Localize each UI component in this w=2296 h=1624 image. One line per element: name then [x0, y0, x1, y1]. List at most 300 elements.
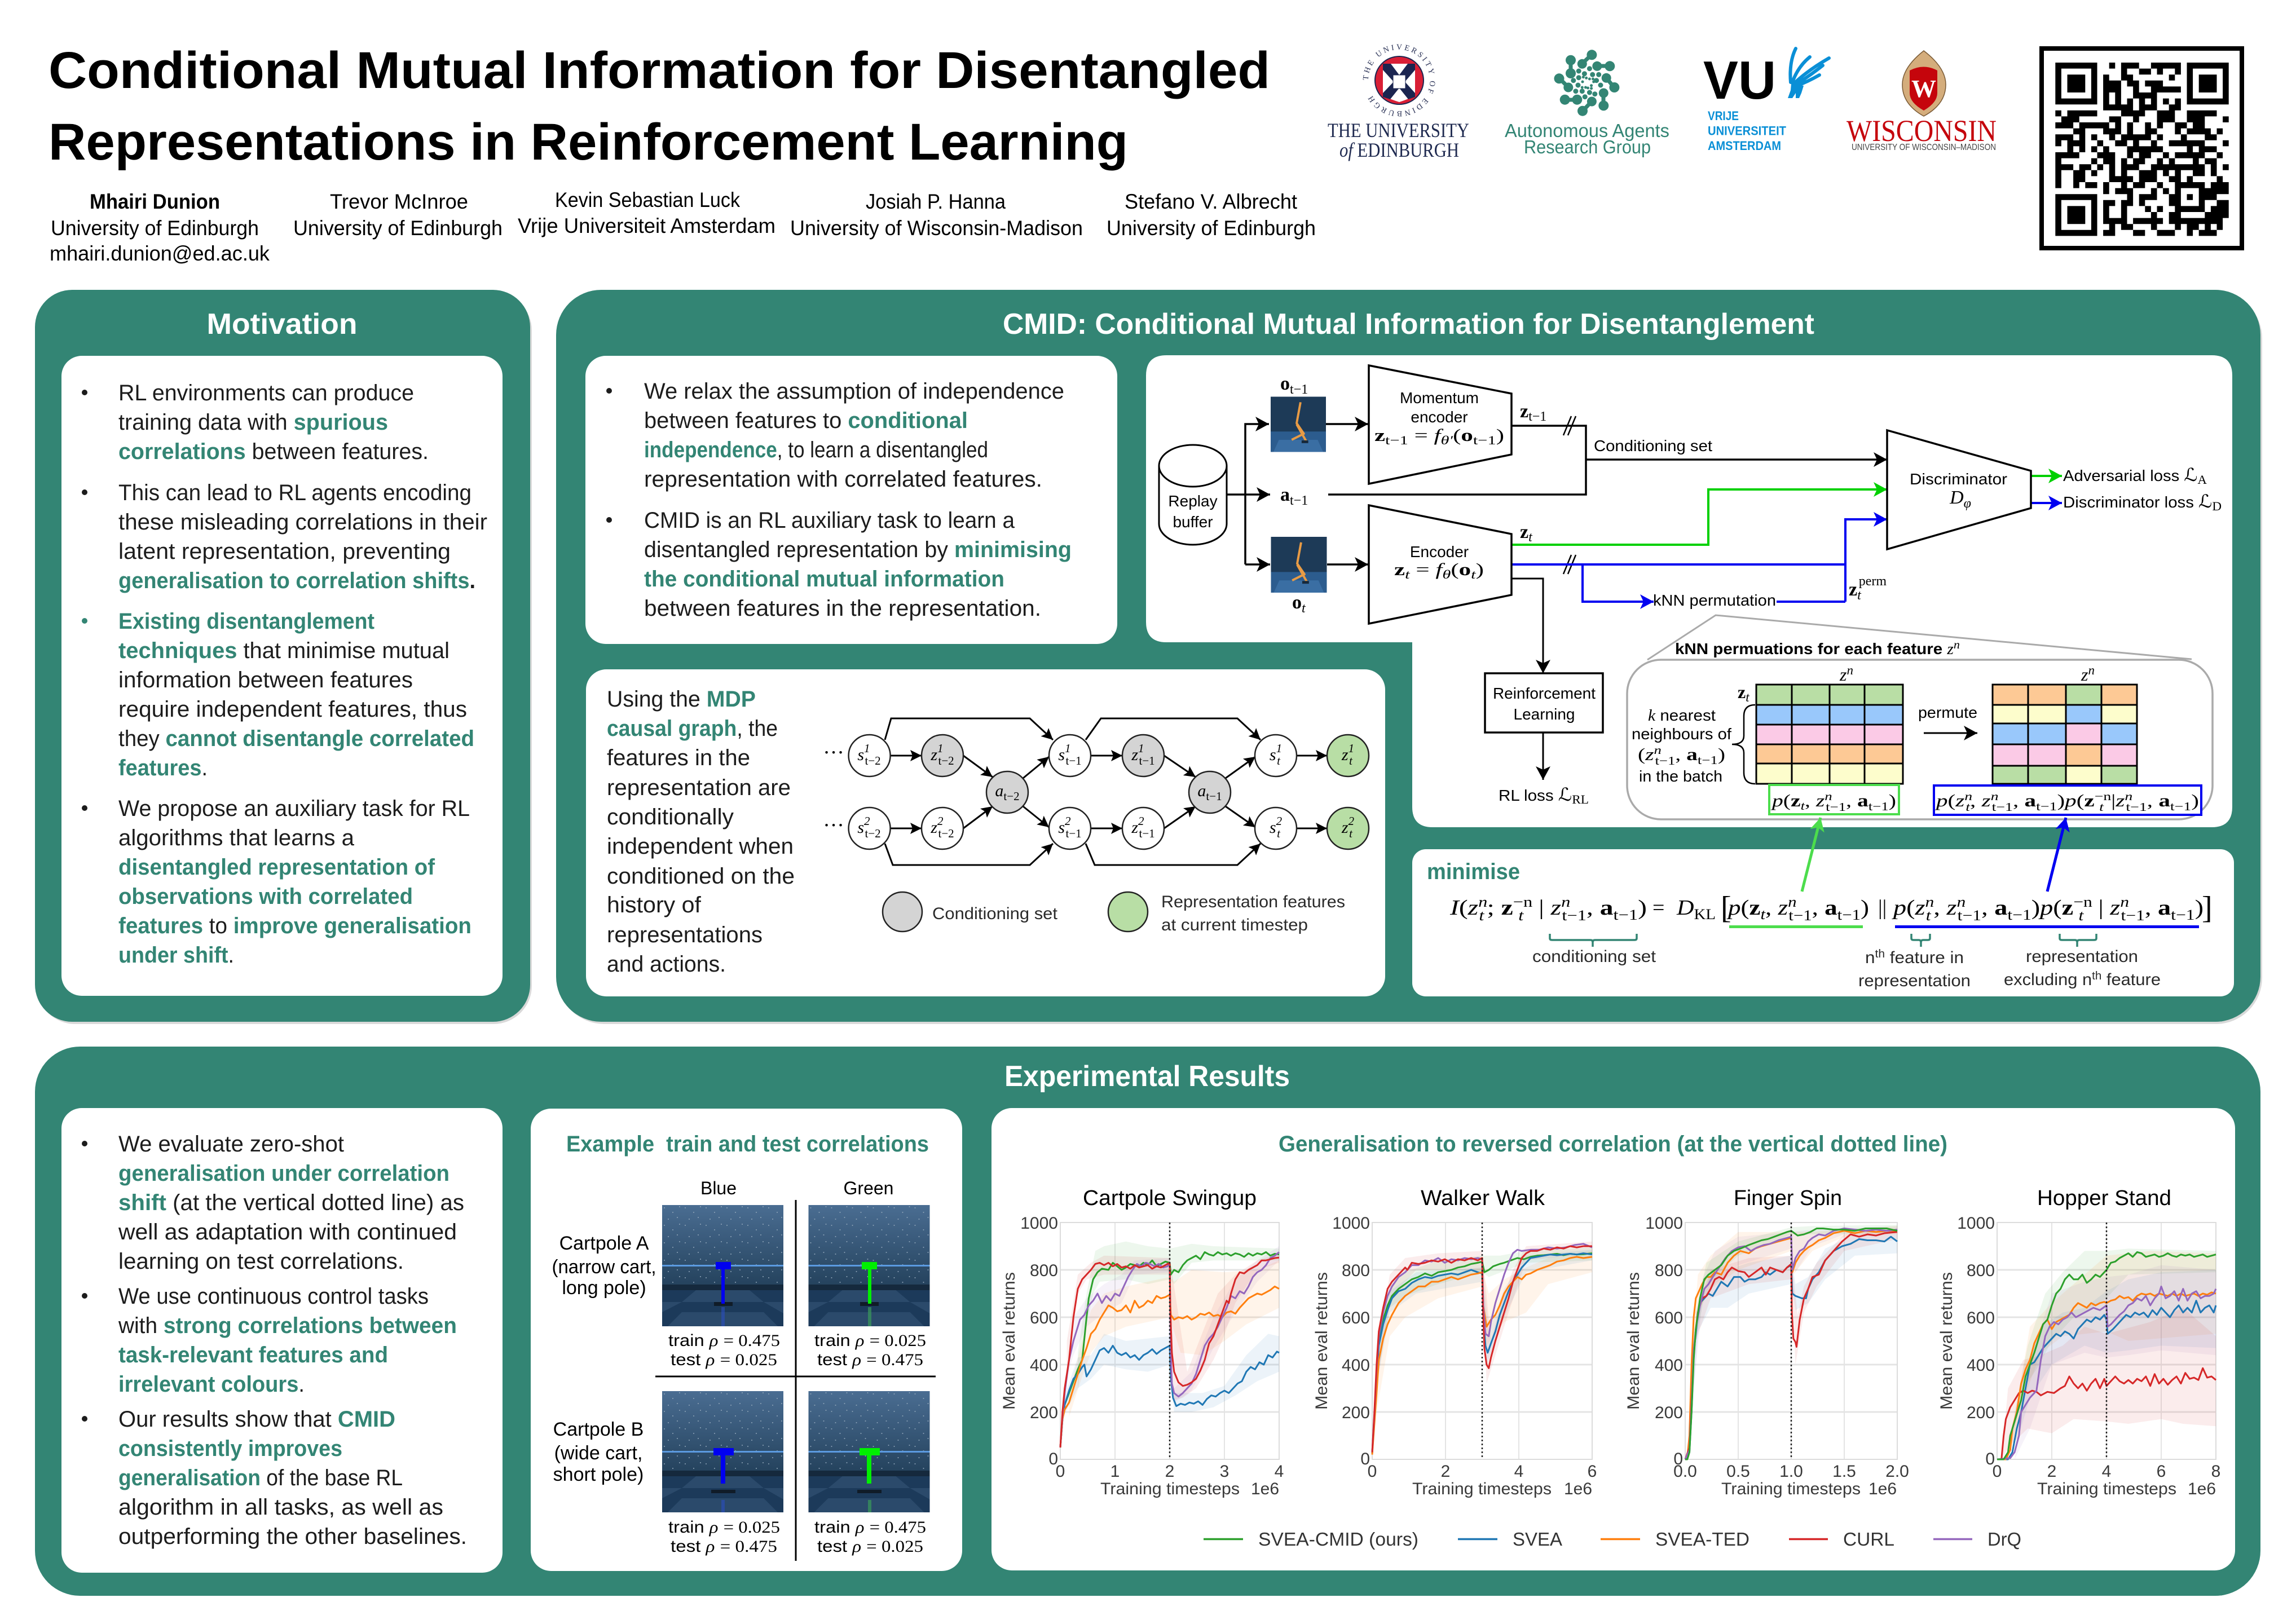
chart: Hopper Stand: 1000	[1957, 1214, 1995, 1233]
CMID bullet 1: independence, to learn a disentangled	[644, 438, 988, 462]
CMID bullet 2: disentangled representation by minimising	[644, 537, 1072, 562]
discriminator loss: D	[2212, 499, 2222, 513]
chart: Walker Walk: 200	[1342, 1404, 1370, 1422]
chart legend: DrQ	[1987, 1529, 2021, 1550]
CMID bullet 1: between features to conditional	[644, 408, 968, 433]
author: Kevin Sebastian Luck	[518, 188, 775, 237]
brace: representation excluding nth feature: th	[2092, 970, 2101, 982]
chart: Finger Spin: 400	[1655, 1356, 1683, 1375]
causal graph: z	[1131, 745, 1138, 764]
logo: University of Wisconsin-Madison: WISCONSIN	[1847, 114, 1997, 148]
chart: Finger Spin	[1624, 1186, 1909, 1498]
causal graph: a	[1197, 782, 1206, 800]
formula: I(z	[1450, 896, 1476, 920]
example correlations box	[531, 1109, 962, 1571]
chart legend	[1204, 1529, 2021, 1550]
encoder	[1369, 505, 1511, 624]
brace: representation excluding nth feature: feature	[2101, 970, 2161, 989]
formula: |	[1532, 896, 1551, 920]
blue product distribution box: p(z	[2065, 791, 2092, 810]
bullet 2: This can lead to RL agents encoding	[118, 480, 471, 505]
latent labels: perm	[1859, 574, 1887, 589]
chart: Finger Spin: 0.0	[1673, 1462, 1697, 1481]
original table: t	[1746, 690, 1749, 704]
causal graph: 2	[937, 814, 944, 828]
bullet 3: information between features	[118, 668, 413, 692]
chart: Cartpole Swingup: 2	[1165, 1462, 1174, 1481]
formula: t	[1479, 907, 1484, 924]
callout title: n	[1954, 638, 1960, 651]
permuted table: z	[2081, 664, 2088, 685]
MDP text: representation are	[607, 775, 791, 800]
causal graph: s	[1270, 745, 1276, 764]
formula: t−1	[1614, 907, 1638, 923]
bullet 1	[82, 381, 429, 464]
callout title: kNN permuations for each feature z	[1675, 640, 1953, 658]
chart: Cartpole Swingup: 4	[1275, 1462, 1284, 1481]
MDP text: conditioned on the	[607, 864, 795, 889]
correlations A blue: test ρ = 0.025	[671, 1351, 777, 1369]
results bullet 2: task-relevant features and	[118, 1343, 388, 1367]
kNN permutation label: kNN permutation	[1653, 592, 1776, 609]
chart: Cartpole Swingup: 200	[1030, 1404, 1058, 1422]
bullet 3: Existing disentanglement	[118, 609, 374, 634]
results bullet 2: with strong correlations between	[118, 1313, 457, 1338]
formula: t−1	[2171, 907, 2195, 923]
encoder: Encoder	[1410, 543, 1469, 561]
author: Mhairi Dunion	[50, 190, 270, 265]
formula: a	[1825, 896, 1837, 920]
causal graph: t	[1349, 827, 1353, 840]
column labels: Blue	[700, 1178, 737, 1198]
title: Conditional Mutual Information for Disentangled	[49, 42, 1270, 99]
formula: ]	[2202, 890, 2213, 925]
logo: University of Wisconsin-Madison: W	[1911, 75, 1936, 103]
kNN callout	[1627, 615, 2213, 819]
architecture diagram box	[1146, 355, 2232, 827]
formula: ,	[1981, 896, 1994, 920]
blue product distribution box: t	[1966, 800, 1971, 814]
causal graph: 1	[1348, 742, 1354, 755]
causal graph: s	[1058, 818, 1065, 837]
row label A: long pole)	[562, 1277, 646, 1299]
green joint distribution box: t	[1801, 799, 1806, 813]
minimise heading: minimise	[1427, 859, 1520, 884]
logo: Vrije Universiteit Amsterdam: VRIJE	[1708, 109, 1739, 123]
bullet 3: require independent features, thus	[118, 697, 467, 722]
formula: t−1	[1788, 907, 1812, 924]
CMID bullet 2: between features in the representation.	[644, 596, 1041, 621]
replay buffer	[1159, 445, 1227, 545]
author: Stefano V. Albrecht: University of Edinburgh	[1107, 217, 1316, 240]
bullet 1: correlations between features.	[118, 439, 429, 464]
bullet 3: techniques that minimise mutual	[118, 638, 449, 663]
blue product distribution box: t−1	[2170, 800, 2191, 813]
image: cartpole A green	[809, 1205, 929, 1326]
chart: Hopper Stand: Mean eval returns	[1937, 1272, 1956, 1410]
correlations B green: train ρ = 0.475	[814, 1518, 926, 1537]
results bullet 2: We use continuous control tasks	[118, 1284, 429, 1309]
results bullet 1	[82, 1132, 464, 1274]
blue product distribution box: t−1	[2036, 800, 2057, 813]
row label B: short pole)	[553, 1464, 644, 1485]
causal graph: ···	[823, 814, 845, 837]
formula: z	[1551, 896, 1559, 920]
latent labels: t	[1528, 530, 1533, 545]
chart: Walker Walk	[1312, 1186, 1597, 1498]
chart legend: SVEA-TED	[1655, 1529, 1749, 1550]
formula: p(z	[1893, 896, 1923, 920]
k nearest neighbours label: t−1	[1655, 754, 1675, 767]
formula: t	[1926, 907, 1931, 924]
chart: Walker Walk: Mean eval returns	[1312, 1272, 1331, 1410]
k nearest neighbours label: )	[1718, 744, 1725, 764]
brace: conditioning set	[1532, 934, 1656, 966]
formula: t−1	[2121, 907, 2145, 924]
MDP text: representations	[607, 923, 763, 947]
panel: Motivation	[35, 290, 532, 1024]
chart: Cartpole Swingup: 3	[1220, 1462, 1229, 1481]
reinforcement learning box	[1485, 673, 1603, 732]
momentum encoder: z	[1374, 425, 1385, 445]
author: Josiah P. Hanna	[790, 190, 1083, 240]
chart: Cartpole Swingup: 0	[1048, 1450, 1058, 1468]
chart: Walker Walk: Training timesteps	[1412, 1480, 1552, 1498]
MDP text: independent when	[607, 834, 794, 859]
chart: Finger Spin: 1000	[1645, 1214, 1683, 1233]
momentum encoder: Momentum	[1400, 389, 1479, 407]
causal graph: a	[995, 782, 1003, 800]
legend: conditioning set: Conditioning set	[932, 904, 1058, 923]
blue product distribution box: )	[2191, 791, 2199, 810]
chart: Walker Walk: 400	[1342, 1356, 1370, 1375]
causal graph: 2	[1276, 814, 1283, 828]
k nearest neighbours label: (z	[1638, 744, 1652, 764]
causal graph: z	[1342, 818, 1348, 837]
latent labels	[1520, 401, 1887, 603]
formula: −n	[1513, 894, 1532, 910]
momentum encoder: t−1	[1385, 433, 1408, 447]
chart: Walker Walk: 600	[1342, 1309, 1370, 1327]
causal graph: t−2	[865, 754, 881, 767]
author: Kevin Sebastian Luck: Vrije Universiteit Amsterdam	[518, 214, 775, 237]
blue product distribution box: )	[2057, 791, 2065, 810]
blue product distribution box: z	[2116, 791, 2122, 810]
blue product distribution box: t	[2099, 800, 2104, 814]
chart legend: SVEA	[1513, 1529, 1562, 1550]
chart: Hopper Stand: 800	[1967, 1261, 1995, 1280]
arrows: green and blue	[1511, 476, 2062, 602]
CMID bullet 2	[606, 508, 1072, 621]
discriminator: Discriminator	[1910, 470, 2007, 488]
bullet 2: latent representation, preventing	[118, 539, 451, 564]
causal graph: ···	[823, 741, 845, 765]
formula: p(z	[2040, 896, 2072, 920]
formula: ;	[1487, 896, 1501, 920]
MDP text: and actions.	[607, 952, 726, 977]
chart: Cartpole Swingup: Cartpole Swingup	[1083, 1186, 1257, 1210]
causal graph: s	[857, 818, 864, 837]
blue product distribution box: n	[1991, 789, 1999, 803]
bullet 2: these misleading correlations in their	[118, 510, 487, 535]
causal graph: t	[1277, 827, 1281, 840]
correlations A blue: train ρ = 0.475	[668, 1331, 780, 1350]
formula: n	[2120, 894, 2129, 910]
causal graph: 1	[1065, 742, 1070, 755]
brace: representation excluding nth feature	[2004, 934, 2161, 989]
chart: Walker Walk: 2	[1441, 1462, 1450, 1481]
causal graph: t−1	[1206, 789, 1222, 803]
causal graph: t−2	[938, 827, 954, 840]
green joint distribution box	[1769, 785, 1899, 814]
encoder: θ	[1442, 567, 1451, 581]
chart: Finger Spin: 2.0	[1885, 1462, 1909, 1481]
bullet 4: We propose an auxiliary task for RL	[118, 796, 470, 821]
brace: nth feature: n	[1865, 948, 1875, 967]
causal graph: 2	[1065, 814, 1071, 828]
correlations A green: test ρ = 0.475	[817, 1351, 923, 1369]
results bullet 1: well as adaptation with continued	[118, 1220, 457, 1245]
chart: Finger Spin: 0.5	[1726, 1462, 1750, 1481]
formula: [	[1721, 890, 1731, 925]
minimise box	[1412, 849, 2234, 996]
chart: Walker Walk: 4	[1514, 1462, 1523, 1481]
formula	[1449, 890, 2213, 925]
blue product distribution box: n	[1964, 789, 1972, 803]
encoder: z	[1394, 559, 1405, 579]
formula: |	[2092, 896, 2110, 920]
causal graph: t−1	[1066, 827, 1082, 840]
correlations A green: train ρ = 0.025	[814, 1331, 926, 1350]
brace: representation excluding nth feature: excluding n	[2004, 970, 2090, 989]
chart: Finger Spin: 1.5	[1832, 1462, 1856, 1481]
permute arrow: permute	[1918, 704, 1977, 721]
correlations B blue	[668, 1518, 780, 1556]
author: Stefano V. Albrecht	[1107, 190, 1316, 240]
formula: z	[1778, 896, 1786, 920]
formula: n	[1925, 894, 1934, 910]
causal graph: z	[1342, 745, 1348, 764]
results bullet 3: consistently improves	[118, 1436, 342, 1461]
formula: a	[1994, 896, 2007, 920]
k nearest neighbours label: a	[1686, 744, 1698, 764]
formula: n	[1561, 894, 1570, 910]
adversarial loss: Adversarial loss ℒ	[2063, 464, 2197, 486]
logo: University of Edinburgh: THE UNIVERSITY OF EDINBURGH	[1363, 44, 1435, 116]
bullet 3	[82, 609, 474, 780]
QR code	[2042, 48, 2242, 248]
encoder: t	[1471, 567, 1477, 581]
formula: t−1	[1958, 907, 1981, 924]
encoder: f	[1435, 559, 1440, 579]
k nearest neighbours label: ,	[1675, 744, 1686, 764]
chart: Finger Spin: Mean eval returns	[1624, 1272, 1643, 1410]
logo: Vrije Universiteit Amsterdam: AMSTERDAM	[1708, 139, 1781, 153]
logo: Vrije Universiteit Amsterdam	[1703, 48, 1829, 153]
latent labels: t−1	[1528, 409, 1546, 424]
green joint distribution box: )	[1889, 791, 1896, 810]
correlations B blue: test ρ = 0.475	[671, 1537, 777, 1556]
chart: Cartpole Swingup	[1000, 1186, 1284, 1498]
observation image t: t	[1302, 601, 1306, 616]
chart: Finger Spin: 1e6	[1868, 1480, 1897, 1498]
chart: Walker Walk: 0	[1360, 1450, 1370, 1468]
correlations B green: test ρ = 0.025	[817, 1537, 923, 1556]
formula: a	[1600, 896, 1614, 920]
results bullet 1: generalisation under correlation	[118, 1161, 449, 1186]
correlations B blue: train ρ = 0.025	[668, 1518, 780, 1537]
chart: Hopper Stand: 200	[1967, 1404, 1995, 1422]
original table: z	[1840, 664, 1847, 685]
row label B: Cartpole B	[553, 1419, 644, 1440]
discriminator: φ	[1964, 496, 1971, 511]
CMID text box	[585, 356, 1117, 644]
CMID bullet 2: CMID is an RL auxiliary task to learn a	[644, 508, 1015, 533]
k nearest neighbours label: k nearest	[1648, 707, 1716, 725]
bullet 2: generalisation to correlation shifts.	[118, 568, 475, 593]
chart: Finger Spin: 200	[1655, 1404, 1683, 1422]
causal graph: t−2	[1003, 789, 1020, 803]
image: cartpole B blue	[662, 1391, 783, 1512]
chart: Walker Walk: 1e6	[1564, 1480, 1592, 1498]
formula: t−1	[1562, 907, 1587, 924]
chart: Hopper Stand: 0	[1993, 1462, 2002, 1481]
conditioning set label: Conditioning set	[1594, 437, 1712, 454]
causal graph: t−1	[1066, 754, 1082, 767]
brace: nth feature	[1858, 934, 1971, 990]
author: Mhairi Dunion: mhairi.dunion@ed.ac.uk	[50, 242, 270, 265]
logo: Vrije Universiteit Amsterdam: UNIVERSITEIT	[1708, 124, 1787, 138]
original table: n	[1847, 663, 1853, 677]
logo: University of Edinburgh	[1328, 44, 1469, 161]
chart: Finger Spin: 800	[1655, 1261, 1683, 1280]
action label: a	[1280, 484, 1290, 505]
observation image t: o	[1292, 592, 1302, 613]
formula: z	[2110, 896, 2118, 920]
RL loss: RL loss ℒ	[1499, 784, 1571, 805]
formula: ,	[2145, 896, 2158, 920]
chart: Cartpole Swingup: 600	[1030, 1309, 1058, 1327]
chart: Walker Walk: 1000	[1332, 1214, 1370, 1233]
results bullet 2	[82, 1284, 457, 1397]
encoder: =	[1410, 559, 1435, 579]
CMID bullet 1	[606, 379, 1064, 492]
chart: Hopper Stand: 6	[2157, 1462, 2166, 1481]
formula: p(z	[1728, 896, 1759, 920]
example heading: Example train and test correlations	[566, 1132, 929, 1157]
legend: conditioning set	[883, 892, 1058, 932]
author: Josiah P. Hanna: Josiah P. Hanna	[866, 190, 1006, 213]
column labels	[700, 1178, 893, 1198]
chart: Cartpole Swingup: 800	[1030, 1261, 1058, 1280]
chart: Hopper Stand: 8	[2211, 1462, 2220, 1481]
bullet 3: features.	[118, 756, 208, 780]
RL loss: RL	[1572, 792, 1589, 806]
bullet 4: features to improve generalisation	[118, 914, 471, 938]
bullet 4: disentangled representation of	[118, 855, 435, 880]
brace: representation excluding nth feature: representation	[2026, 947, 2138, 966]
formula: a	[2158, 896, 2171, 920]
causal graph: 2	[864, 814, 870, 828]
observation image t-1: o	[1280, 373, 1290, 394]
observation image t	[1271, 537, 1327, 616]
discriminator loss: Discriminator loss ℒ	[2063, 491, 2211, 512]
encoder: )	[1476, 559, 1484, 579]
formula underlines	[1729, 925, 2199, 928]
logo: Autonomous Agents Research Group: Research Group	[1524, 136, 1651, 157]
logo: University of Edinburgh: THE UNIVERSITY	[1328, 119, 1469, 142]
CMID bullet 1: We relax the assumption of independence	[644, 379, 1064, 404]
chart: Hopper Stand: 1e6	[2188, 1480, 2216, 1498]
motivation text box	[61, 356, 503, 996]
title	[49, 42, 1270, 171]
author: Trevor McInroe: University of Edinburgh	[293, 217, 503, 240]
row label A: (narrow cart,	[552, 1256, 656, 1278]
CMID bullet 1: representation with correlated features.	[644, 467, 1042, 492]
heading: CMID: CMID: Conditional Mutual Information for Disentanglement	[1003, 308, 1814, 341]
momentum encoder: f	[1434, 425, 1439, 445]
action label: t−1	[1290, 493, 1308, 508]
bullet 4: observations with correlated	[118, 884, 413, 909]
k nearest neighbours label: in the batch	[1639, 767, 1722, 785]
chart: Cartpole Swingup: 400	[1030, 1356, 1058, 1375]
MDP text: Using the MDP	[607, 687, 756, 712]
causal graph: 2	[1138, 814, 1144, 828]
bullet 4: algorithms that learns a	[118, 826, 355, 850]
latent labels: t	[1857, 588, 1862, 603]
formula: t	[1761, 906, 1766, 923]
formula: t−1	[2007, 907, 2031, 923]
reinforcement learning box: Learning	[1514, 705, 1575, 723]
authors	[50, 188, 1316, 265]
bullet 4: under shift.	[118, 943, 234, 968]
blue product distribution box: |	[2111, 791, 2116, 810]
k nearest neighbours label: neighbours of	[1632, 725, 1731, 743]
replay buffer: Replay	[1168, 492, 1218, 510]
image: cartpole B green	[809, 1391, 929, 1512]
brace: nth feature: representation	[1858, 972, 1971, 990]
results bullet 1: We evaluate zero-shot	[118, 1132, 344, 1157]
chart: Hopper Stand: Training timesteps	[2037, 1480, 2176, 1498]
correlations B green	[814, 1518, 926, 1556]
discriminator: D	[1950, 487, 1964, 508]
blue product distribution box: t−1	[1992, 800, 2013, 814]
chart: Hopper Stand: 600	[1967, 1309, 1995, 1327]
logo: University of Wisconsin-Madison	[1847, 51, 1997, 152]
column labels: Green	[844, 1178, 893, 1198]
causal graph	[823, 718, 1369, 865]
green joint distribution box: a	[1857, 791, 1868, 810]
correlations A green	[814, 1331, 926, 1369]
formula: t	[2079, 907, 2084, 924]
momentum encoder: encoder	[1411, 408, 1468, 426]
original table: z	[1738, 682, 1746, 702]
formula: z	[1946, 896, 1955, 920]
permute arrow	[1918, 704, 1977, 733]
momentum encoder: =	[1408, 425, 1434, 445]
MDP text	[607, 687, 795, 977]
heading: Motivation: Motivation	[206, 308, 358, 341]
MDP text: causal graph, the	[607, 716, 778, 741]
results bullet 3: outperforming the other baselines.	[118, 1524, 467, 1549]
results bullet 3: algorithm in all tasks, as well as	[118, 1495, 443, 1520]
encoder: (	[1451, 559, 1459, 579]
results bullet 3	[82, 1407, 467, 1549]
blue product distribution box: −n	[2095, 789, 2112, 803]
arrow: blue	[2047, 818, 2066, 892]
formula: ||	[1878, 896, 1887, 920]
legend: representation features: Representation features	[1161, 893, 1345, 911]
